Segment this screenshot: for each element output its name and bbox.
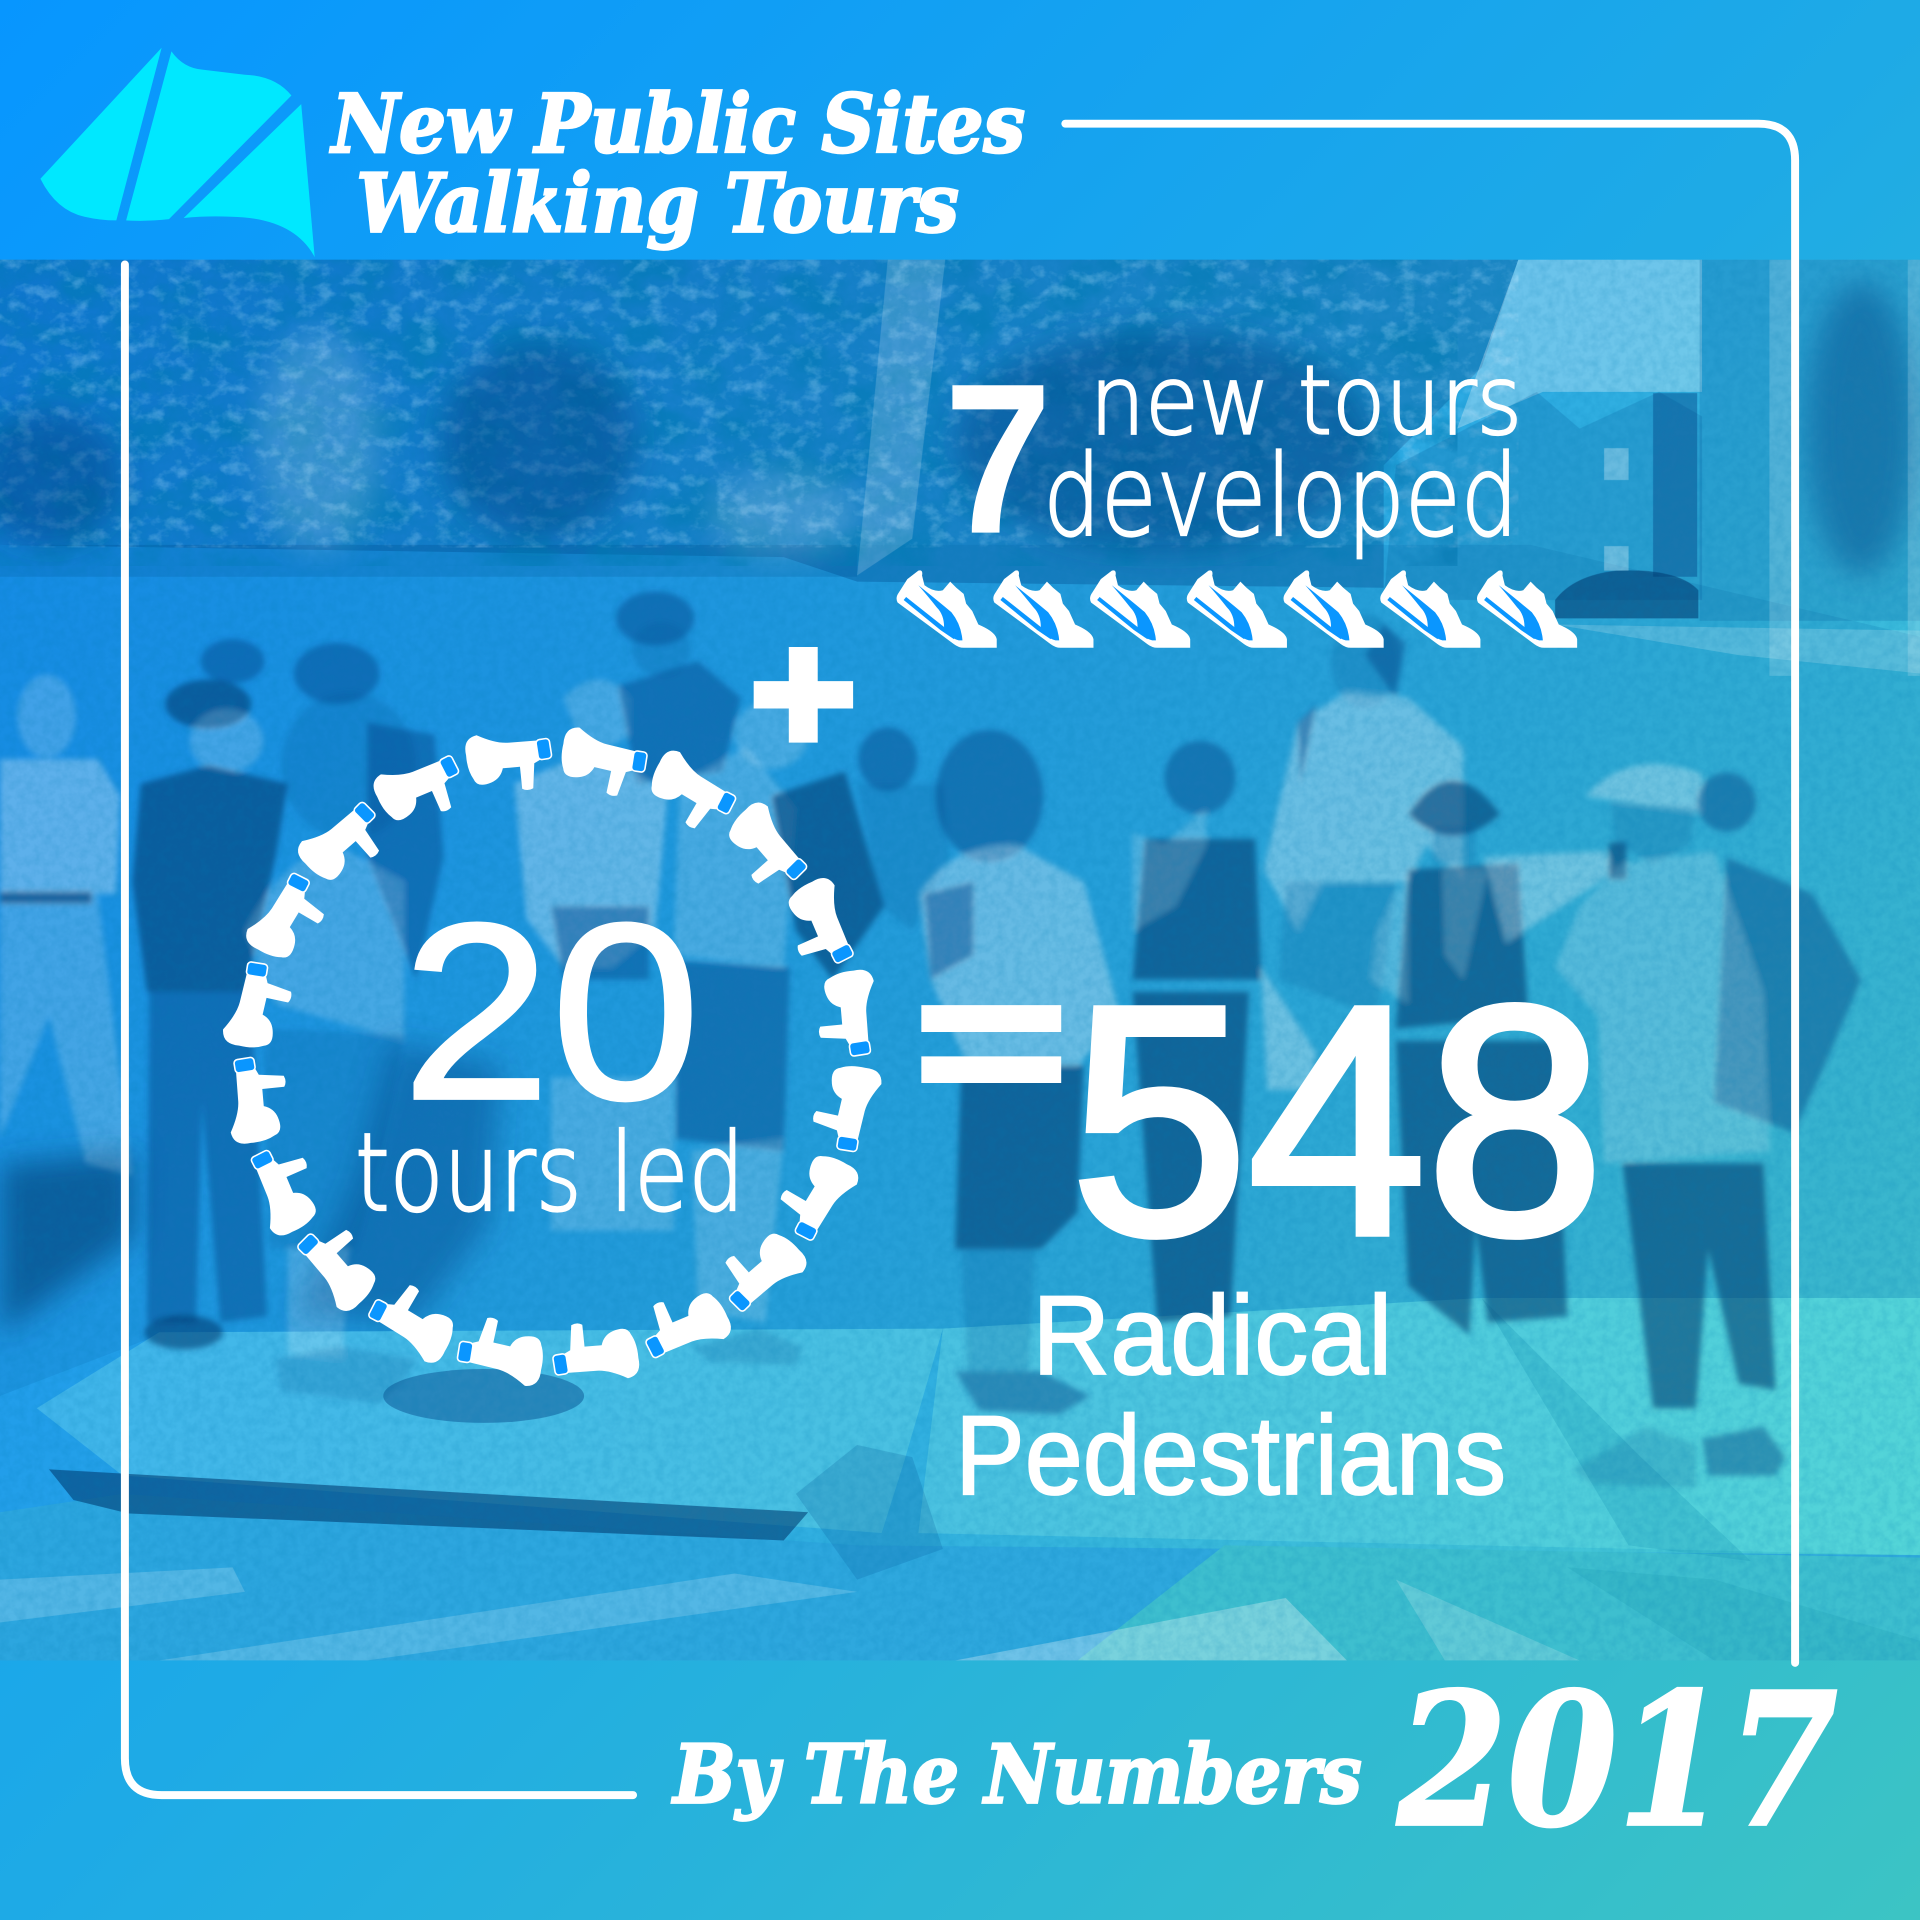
stat: 7 new tours developed: new tours — [1090, 344, 1522, 456]
stat: 548 Radical Pedestrians: Pedestrians — [955, 1392, 1506, 1518]
people on the right — [918, 615, 1861, 1488]
footer heading: By The Numbers — [672, 1727, 1362, 1822]
title — [329, 77, 1025, 251]
title: New Public Sites — [329, 77, 1025, 172]
houses and sky — [1384, 260, 1920, 676]
logo: three-panel folded map — [40, 48, 315, 257]
pavement — [0, 1298, 1920, 1660]
stat: 548 Radical Pedestrians — [955, 939, 1604, 1518]
stat: 7 new tours developed: developed — [1043, 430, 1518, 562]
top band — [0, 0, 1920, 260]
stat: 548 Radical Pedestrians: Radical — [1032, 1272, 1392, 1398]
grass — [0, 545, 1920, 1396]
ground shadows — [0, 1041, 502, 1335]
stat: 7 new tours developed — [944, 340, 1522, 579]
stat: 7 new tours developed: 7 — [944, 340, 1052, 579]
plus sign: + — [751, 598, 856, 789]
footer heading: 2017 — [1396, 1653, 1838, 1868]
icons: seven shoes — [897, 570, 1577, 648]
panel: duotone photo of walking tour group — [0, 260, 1920, 1660]
stat: 20 tours led: 20 — [402, 872, 700, 1152]
title: Walking Tours — [356, 156, 959, 251]
people on the left — [0, 591, 949, 1403]
tree line — [0, 260, 1518, 588]
equals sign: = — [915, 936, 1068, 1148]
stat: 20 tours led: tours led — [355, 1111, 744, 1236]
stat: 548 Radical Pedestrians: 548 — [1070, 939, 1604, 1303]
rounded white frame — [125, 124, 1795, 1795]
bottom band — [0, 1660, 1920, 1920]
footer heading — [672, 1653, 1838, 1868]
icons: ring of twenty megaphones — [220, 724, 885, 1389]
stat: 20 tours led — [355, 872, 744, 1236]
